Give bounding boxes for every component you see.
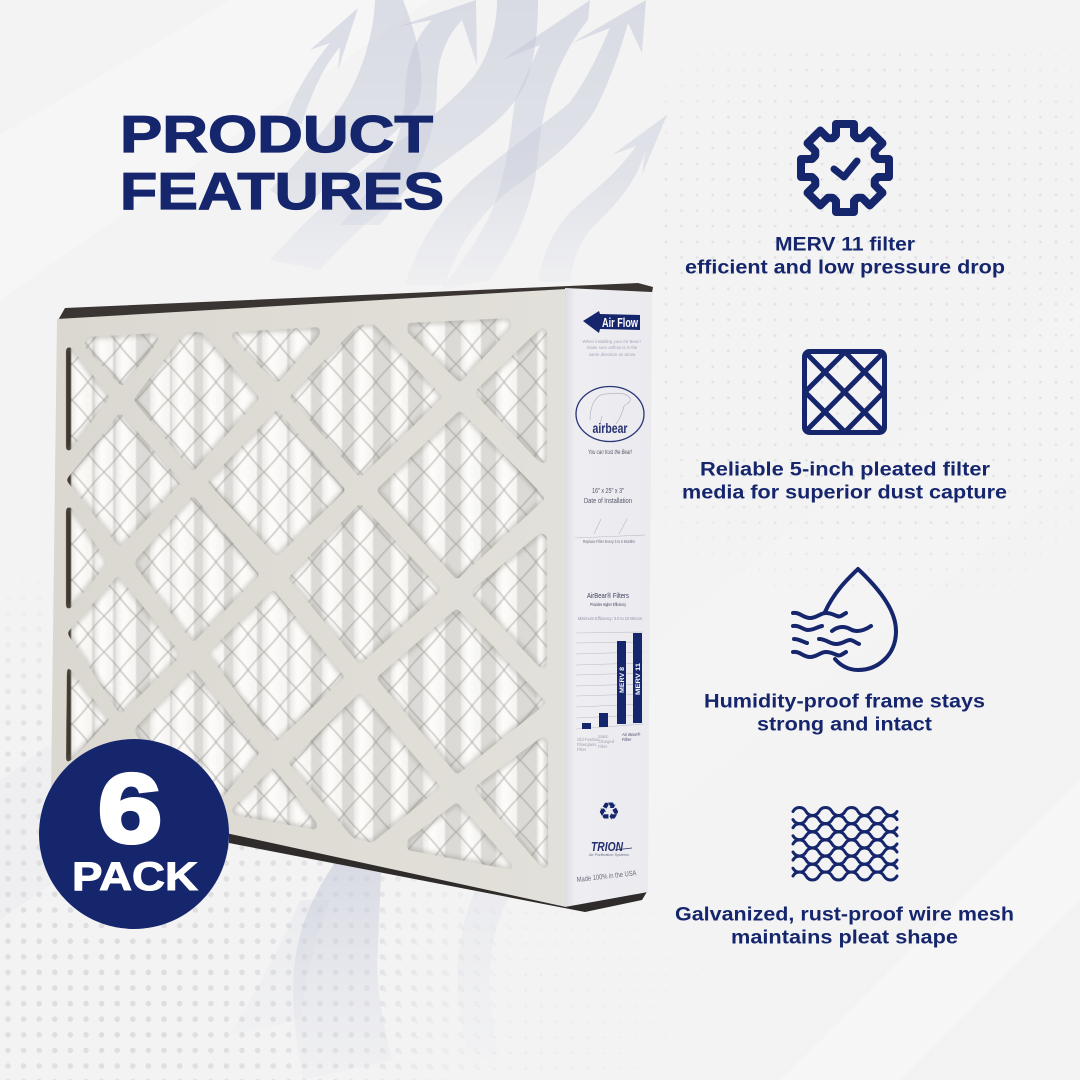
side bar chart: Charged [598,739,615,744]
side panel of filter box [565,288,652,907]
icon: wire mesh [793,808,897,880]
feature text [675,904,1014,948]
side bar chart: Old Fashion [577,737,600,742]
icon: recycling symbol: ♻ [598,797,620,826]
filter product [51,283,653,912]
title: PRODUCT [120,106,433,164]
feature text: Galvanized, rust-proof wire mesh [675,904,1014,926]
background airflow arrows, top [270,0,667,290]
feature: wire mesh [675,808,1014,948]
pleated media seen through the lattice openings [60,310,549,880]
feature: humidity proof [704,569,985,736]
filter media top and bottom edge [57,283,653,912]
installation note: same direction as arrow [589,352,636,357]
side chart heading: Provides Higher Efficiency [590,602,627,607]
badge: 6 pack: 6 [98,754,162,863]
replacement line [575,519,645,544]
air flow arrow [583,311,640,333]
feature text: efficient and low pressure drop [685,258,1005,278]
airbear logo: You can trust the Bear! [588,450,632,456]
side bar chart [576,632,643,752]
side bar chart: MERV 8 [619,667,626,693]
icon: water drop with waves [793,569,896,670]
side bar chart: Static [598,734,608,739]
feature text: MERV 11 filter [775,234,916,256]
trion logo: TRION [591,840,624,854]
feature text: Reliable 5-inch pleated filter [700,460,991,480]
icon: gear with check [801,124,889,212]
airbear logo [576,386,644,456]
side bar chart: MERV 11 [635,663,642,695]
feature: MERV 11 filter [685,124,1005,278]
airbear logo: airbear [592,421,628,436]
feature text: maintains pleat shape [731,928,958,948]
side bar chart: Filter [598,744,608,749]
background airflow arrows, bottom [230,850,510,1080]
side bar chart: Air Bear® [621,732,641,737]
cardboard frame [51,289,566,907]
feature: pleated media [682,352,1007,504]
side bar chart: Filter [577,747,587,752]
installation note [583,339,642,357]
air flow arrow: Air Flow [602,315,639,330]
size and date [584,488,632,505]
size and date: 16" x 25" x 3" [592,488,624,495]
trion logo: Air Purification Systems [589,853,629,857]
feature text [682,460,1007,504]
made in usa text: Made 100% in the USA [576,868,637,884]
size and date: Date of Installation [584,498,632,505]
side bar chart: Filter [622,737,632,742]
side chart heading: Minimum Efficiency: 3.0 to 10 Micron [578,616,642,622]
feature text: media for superior dust capture [682,482,1007,504]
feature text: strong and intact [757,714,933,736]
badge: 6 pack: PACK [72,855,198,899]
replacement line: Replace Filter Every 3 to 6 Months [583,539,636,544]
badge: 6 pack [39,739,229,929]
feature text: Humidity-proof frame stays [704,692,985,712]
title: FEATURES [120,163,444,221]
side chart heading [578,591,642,622]
title [120,106,444,221]
installation note: When installing your Air Bear+ [583,339,642,344]
installation note: make sure airflow is in the [587,345,638,350]
side chart heading: AirBear® Filters [587,591,629,600]
side bar chart: Fiberglass [577,742,596,747]
feature text [685,234,1005,278]
feature text [704,692,985,736]
icon: pleated filter grid [804,352,884,432]
